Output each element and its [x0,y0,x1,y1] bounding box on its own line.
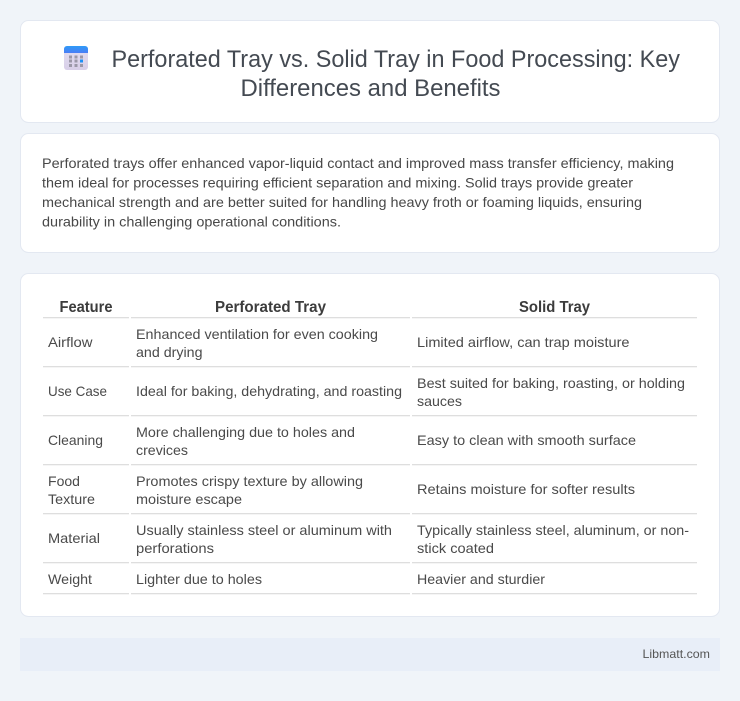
row: cleaning: Easy to clean with smooth surface [417,432,636,448]
intro text [42,155,674,230]
table header row: Perforated Tray [215,299,326,316]
intro card [20,134,720,252]
row: food texture: Retains moisture for softer results [417,481,635,497]
row: material: Material [48,530,100,546]
table header row: Feature [60,299,113,316]
footer bar [20,638,720,671]
intro text: durability in challenging operational conditions. [42,214,341,230]
title: Perforated Tray vs. Solid Tray in Food Processing: Key [112,46,680,73]
table card [20,274,720,616]
row: material [48,522,689,556]
row: food texture: moisture escape [136,491,242,507]
row: cleaning: More challenging due to holes and [136,424,355,440]
row: use case: Ideal for baking, dehydrating, and roasting [136,383,402,399]
row: material: Usually stainless steel or aluminum with [136,522,392,538]
row: food texture: Food [48,473,80,489]
row: weight: Weight [48,571,92,587]
header card [20,20,720,122]
row: use case [48,375,685,409]
table rules [43,317,697,594]
row: airflow: Airflow [48,334,93,350]
row: use case: Use Case [48,383,107,399]
row: cleaning: crevices [136,442,188,458]
row: weight: Heavier and sturdier [417,571,545,587]
table header row: Solid Tray [519,299,590,316]
title [112,46,680,102]
row: weight [48,571,545,587]
row: material: Typically stainless steel, aluminum, or non- [417,522,689,538]
row: cleaning [48,424,636,458]
row: food texture [48,473,635,507]
row: food texture: Texture [48,491,95,507]
intro text: mechanical strength and are better suited for handling heavy froth or foaming liquids, ensuring [42,194,642,210]
footer text: Libmatt.com [642,647,710,661]
row: food texture: Promotes crispy texture by allowing [136,473,363,489]
row: use case: Best suited for baking, roasting, or holding [417,375,685,391]
row: airflow: Enhanced ventilation for even cooking [136,326,378,342]
row: airflow: and drying [136,344,202,360]
intro text: Perforated trays offer enhanced vapor-liquid contact and improved mass transfer efficiency, making [42,155,674,171]
row: weight: Lighter due to holes [136,571,262,587]
row: use case: sauces [417,393,462,409]
icon: calendar [64,46,88,70]
intro text: them ideal for processes requiring efficient separation and mixing. Solid trays provide greater [42,174,633,190]
row: airflow [48,326,630,360]
row: material: stick coated [417,540,494,556]
table header row [60,299,590,316]
title: Differences and Benefits [240,75,500,102]
row: cleaning: Cleaning [48,432,103,448]
row: airflow: Limited airflow, can trap moisture [417,334,630,350]
row: material: perforations [136,540,214,556]
